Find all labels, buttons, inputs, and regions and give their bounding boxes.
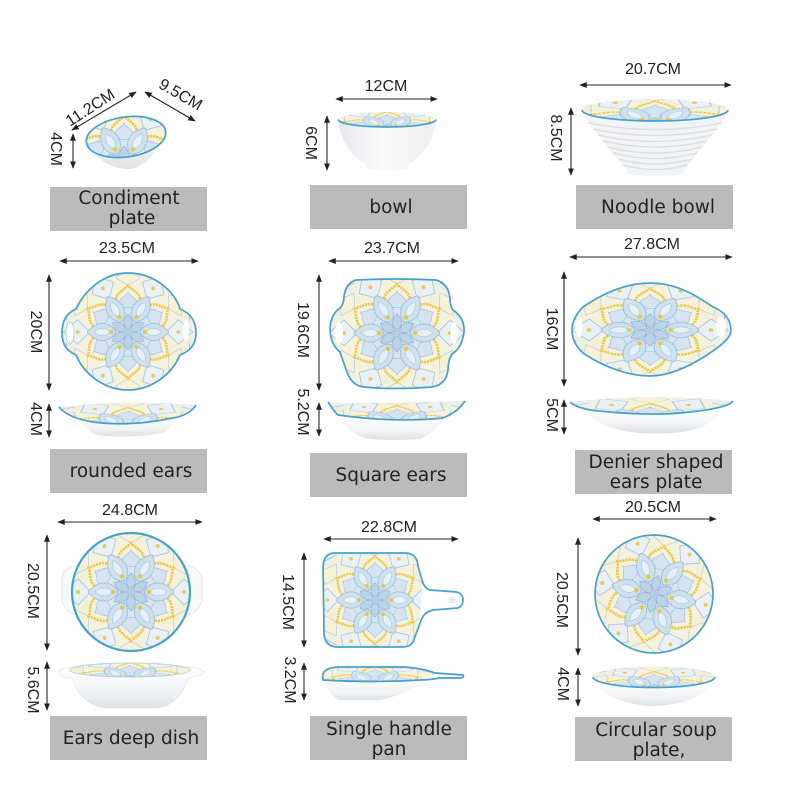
dimension: 6CM: 6CM <box>302 126 319 160</box>
dimension: 23.7CM <box>329 240 458 261</box>
label: ears deep dish <box>50 716 207 760</box>
label: single handle pan: Single handle <box>326 719 452 740</box>
dimension: 4CM: 4CM <box>27 402 44 436</box>
dimension: 4CM <box>554 667 578 706</box>
panel: condiment plate <box>50 79 207 231</box>
dimension: 12CM: 12CM <box>365 78 407 95</box>
dimension: 22.8CM: 22.8CM <box>361 519 417 536</box>
dimension: 12CM <box>336 78 437 99</box>
icon: bowl <box>337 112 437 170</box>
dimension: 20CM: 20CM <box>27 311 44 353</box>
label: single handle pan <box>310 716 467 760</box>
panel: single handle pan <box>279 519 467 760</box>
icon: noodle bowl <box>581 99 729 176</box>
icon: rounded ears plate side <box>58 402 197 436</box>
icon: deep dish top <box>62 532 202 652</box>
icon: soup plate side <box>592 666 716 706</box>
dimension: 19.6CM <box>294 275 319 390</box>
label: noodle bowl: Noodle bowl <box>601 197 715 218</box>
dimension: 8.5CM: 8.5CM <box>547 114 564 162</box>
icon: square ears plate side <box>327 400 466 440</box>
label: circular soup plate <box>575 717 732 761</box>
dimension: 9.5CM: 9.5CM <box>156 76 205 114</box>
dimension: 20.7CM: 20.7CM <box>625 61 681 78</box>
label: square ears <box>310 453 467 497</box>
dimension: 23.5CM: 23.5CM <box>99 240 155 257</box>
dimension: 5.6CM: 5.6CM <box>24 666 41 714</box>
panel: square ears <box>298 242 467 497</box>
dimension: 16CM: 16CM <box>543 308 560 350</box>
panel: ears deep dish <box>28 504 207 760</box>
label: noodle bowl <box>576 185 733 229</box>
dimension: 4CM <box>47 132 73 168</box>
icon: deep dish side <box>58 662 206 708</box>
dimension: 3.2CM: 3.2CM <box>281 656 298 704</box>
panel: bowl <box>306 80 467 229</box>
icon: soup plate top <box>594 534 714 654</box>
dimension: 20.5CM <box>553 538 578 655</box>
dimension: 5.2CM <box>294 388 319 436</box>
panel: denier shaped ears plate <box>547 238 734 494</box>
icon: pan top <box>322 552 464 648</box>
dimension: 4CM: 4CM <box>47 132 64 166</box>
dimension: 22.8CM <box>324 519 458 539</box>
label: denier shaped ears plate: ears plate <box>610 472 702 493</box>
icon: denier plate side <box>570 397 734 434</box>
dimension: 5.2CM: 5.2CM <box>294 388 311 436</box>
dimension: 11.2CM: 11.2CM <box>63 86 118 130</box>
dimension: 20CM <box>27 275 49 390</box>
dimension: 4CM: 4CM <box>554 667 571 701</box>
label: denier shaped ears plate: Denier shaped <box>589 452 723 473</box>
dimension: 20.5CM <box>24 535 47 650</box>
panel: rounded ears <box>31 242 207 493</box>
label: square ears: Square ears <box>336 465 446 486</box>
dimension: 14.5CM: 14.5CM <box>279 574 296 630</box>
label: bowl: bowl <box>369 197 413 218</box>
dimension: 20.5CM: 20.5CM <box>24 563 41 619</box>
dimension: 5.6CM <box>24 662 47 714</box>
dimension: 19.6CM: 19.6CM <box>294 302 311 358</box>
icon: denier plate top <box>571 282 732 377</box>
dimension: 27.8CM: 27.8CM <box>624 236 680 253</box>
dimension: 23.5CM <box>60 240 198 261</box>
panel: circular soup plate <box>557 501 732 761</box>
icon: condiment plate bowl <box>85 116 167 169</box>
dimension: 9.5CM <box>145 76 205 121</box>
label: circular soup plate: plate, <box>633 740 685 761</box>
panel: noodle bowl <box>551 63 733 229</box>
label: rounded ears <box>50 449 207 493</box>
icon: pan side <box>322 666 464 700</box>
dimension: 5CM: 5CM <box>543 398 560 432</box>
dimension: 14.5CM <box>279 553 304 647</box>
dimension: 23.7CM: 23.7CM <box>364 240 420 257</box>
dimension: 20.5CM: 20.5CM <box>553 572 570 628</box>
label: condiment plate: Condiment <box>78 188 180 209</box>
dimension: 8.5CM <box>547 108 571 175</box>
dimension: 6CM <box>302 116 327 170</box>
label: circular soup plate: Circular soup <box>595 720 717 741</box>
label: single handle pan: pan <box>372 739 406 760</box>
label: denier shaped ears plate <box>575 450 732 494</box>
dimension: 24.8CM: 24.8CM <box>102 502 158 519</box>
dimension: 20.5CM <box>593 499 716 519</box>
label: bowl <box>310 185 467 229</box>
dimension: 20.5CM: 20.5CM <box>625 499 681 516</box>
label: rounded ears: rounded ears <box>70 461 192 482</box>
icon: rounded ears plate top <box>61 272 197 391</box>
icon: square ears plate top <box>329 278 465 390</box>
label: ears deep dish: Ears deep dish <box>63 728 199 749</box>
label: condiment plate <box>50 187 207 231</box>
dimension: 16CM <box>543 272 564 386</box>
label: condiment plate: plate <box>109 208 155 229</box>
